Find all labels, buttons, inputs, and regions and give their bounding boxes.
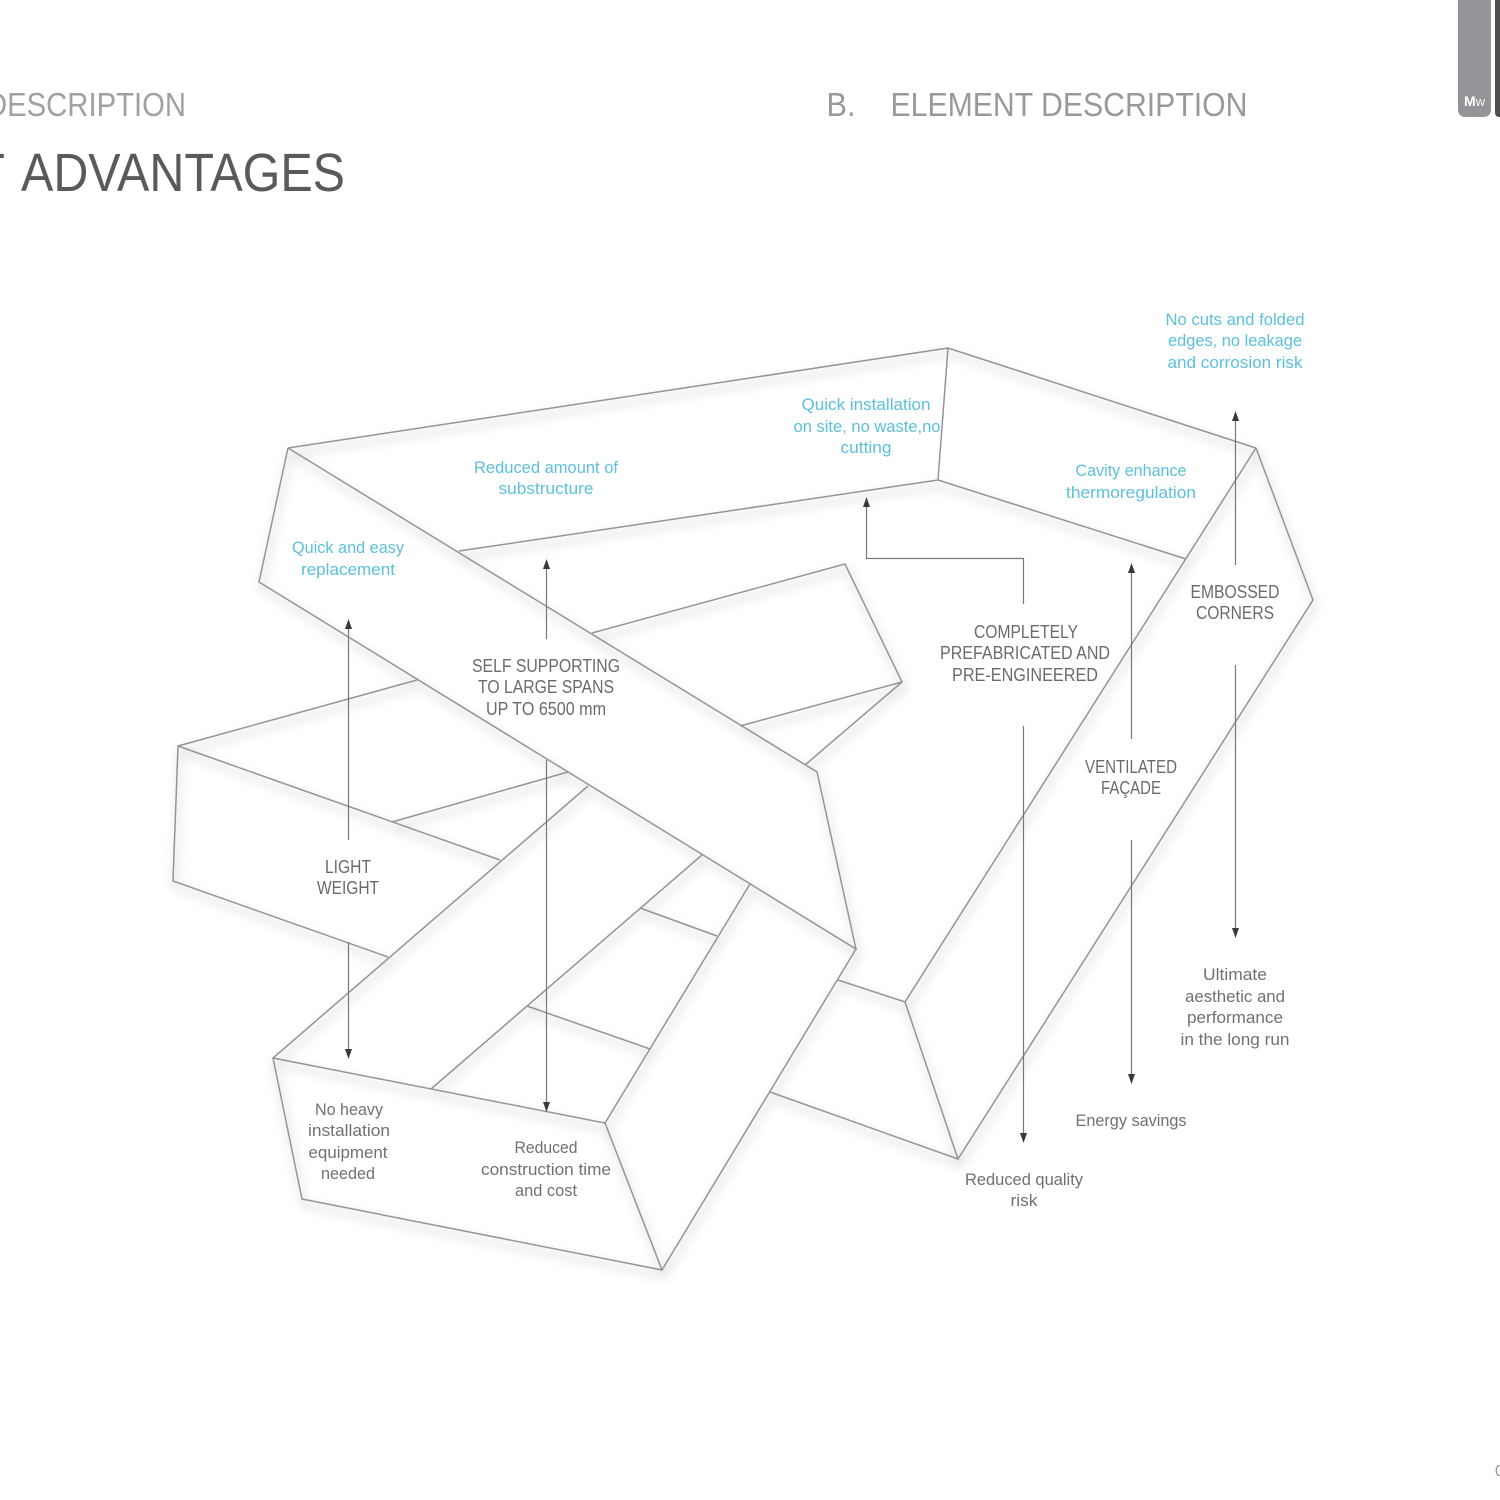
label: no heavy installation equipment: equipment [308,1143,388,1162]
label: no heavy installation equipment: No heavy [315,1100,383,1119]
label: ultimate aesthetic [1180,965,1290,1049]
label: reduced construction time: and cost [515,1181,577,1200]
label: quick and easy replacement: Quick and easy [292,538,404,557]
label: quick installation: on site, no waste,no [794,417,940,436]
arrows: ventilated facade [1128,563,1135,1084]
label: ultimate aesthetic: aesthetic and [1185,987,1285,1006]
label: no cuts and folded edges [1166,310,1304,372]
label: quick installation: Quick installation [802,395,930,414]
label: ultimate aesthetic: performance [1187,1008,1283,1027]
label: no cuts and folded edges: No cuts and folded [1166,310,1304,329]
tab: Mw: MW [1464,93,1486,109]
left block [173,680,568,957]
label: no heavy installation equipment [308,1100,390,1183]
label: no heavy installation equipment: installation [308,1121,390,1140]
label: self supporting [472,656,620,719]
folded ribbon diagram [173,348,1313,1270]
label: ultimate aesthetic: in the long run [1180,1030,1290,1049]
label: ventilated facade: VENTILATED [1085,757,1177,777]
tab: Mw [1458,0,1491,117]
label: completely prefabricated: COMPLETELY [974,622,1078,642]
label: reduced amount of substructure: Reduced amount of [474,458,618,477]
lower band [273,786,856,1270]
label: embossed corners: CORNERS [1196,603,1274,623]
section heading: B. element description: B. [826,86,856,123]
middle band [592,564,902,765]
label: no cuts and folded edges: and corrosion risk [1168,353,1303,372]
label: reduced quality risk: Reduced quality [965,1170,1083,1189]
tab: dark edge [1495,0,1500,117]
label: self supporting: SELF SUPPORTING [472,656,620,676]
label: reduced quality risk [965,1170,1083,1210]
right band [770,448,1313,1159]
label: completely prefabricated: PREFABRICATED AND [940,643,1110,663]
label: no cuts and folded edges: edges, no leakage [1168,331,1302,350]
label: reduced construction time: Reduced [514,1138,578,1157]
label: self supporting: UP TO 6500 mm [486,699,606,719]
section heading: B. element description: ELEMENT DESCRIPTION [890,86,1248,123]
arrows: completely prefabricated [863,497,1027,1143]
label: light weight: LIGHT [325,857,371,877]
label: reduced construction time [481,1138,611,1200]
label: quick and easy replacement [292,538,404,579]
arrows: self supporting [543,559,550,1112]
label: cavity enhance thermoregulation [1066,461,1196,502]
label: completely prefabricated [940,622,1110,685]
label: energy savings: Energy savings [1076,1111,1186,1130]
label: completely prefabricated: PRE-ENGINEERED [952,665,1098,685]
top band [288,348,1256,559]
label: embossed corners [1190,582,1280,623]
label: reduced quality risk: risk [1010,1191,1038,1210]
label: self supporting: TO LARGE SPANS [478,677,614,697]
label: ventilated facade: FAÇADE [1101,778,1161,798]
label: ventilated facade [1085,757,1177,798]
title: advantages: ADVANTAGES [21,143,345,203]
label: embossed corners: EMBOSSED [1190,582,1280,602]
label: cavity enhance thermoregulation: thermoregulation [1066,483,1196,502]
arrows: light weight [345,619,352,1059]
label: reduced amount of substructure [474,458,618,498]
label: quick installation: cutting [840,438,892,457]
left diagonal band [259,448,856,949]
label: quick and easy replacement: replacement [301,560,395,579]
arrows: embossed corners [1232,411,1239,938]
label: ultimate aesthetic: Ultimate [1203,965,1267,984]
label: light weight [317,857,379,898]
label: cavity enhance thermoregulation: Cavity enhance [1076,461,1186,480]
label: reduced construction time: construction time [481,1160,611,1179]
label: quick installation [794,395,940,457]
label: light weight: WEIGHT [317,878,379,898]
label: reduced amount of substructure: substructure [498,479,594,498]
diagram shadow [175,354,1315,1276]
label: no heavy installation equipment: needed [321,1164,375,1183]
